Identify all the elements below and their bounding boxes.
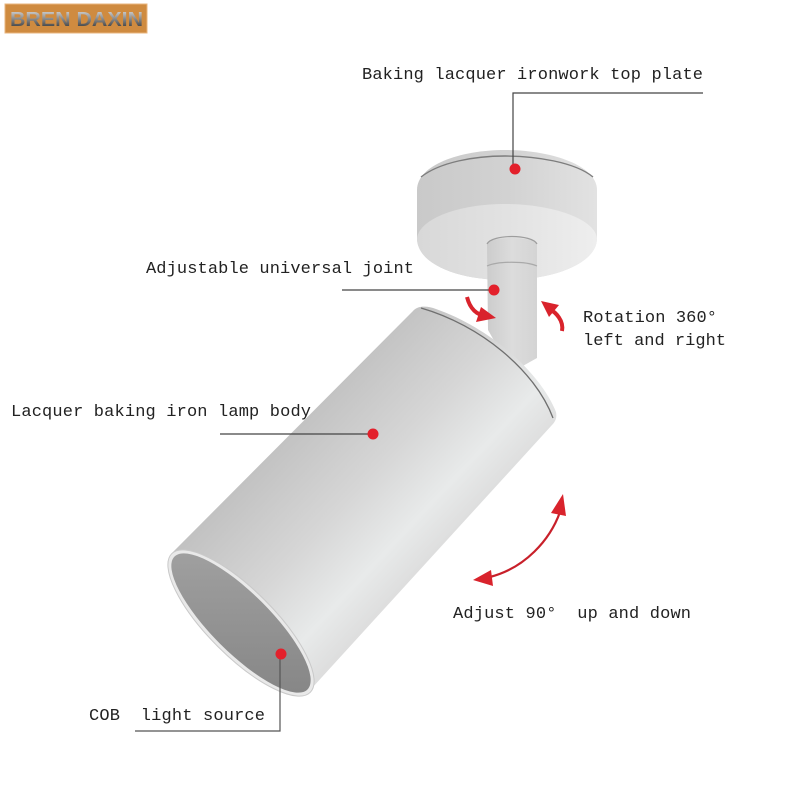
label: top plate: Baking lacquer ironwork top plate (362, 66, 703, 85)
label: universal joint (146, 260, 500, 296)
label: rotation: Rotation 360° (583, 309, 717, 328)
label: universal joint: Adjustable universal joint (146, 260, 414, 279)
arrow: adjust 90 degrees (473, 494, 566, 586)
logo: BREN DAXIN: BREN DAXIN (10, 9, 143, 31)
arrow: rotation left (467, 297, 496, 322)
cylindrical lamp body (172, 307, 556, 688)
label: adjust: Adjust 90° up and down (453, 605, 691, 624)
label: top plate (362, 66, 703, 174)
lamp opening (148, 530, 334, 716)
label: lamp body: Lacquer baking iron lamp body (11, 403, 311, 422)
ceiling top plate (417, 150, 597, 280)
label: lamp body (11, 403, 378, 440)
label: COB light source: COB light source (89, 707, 265, 726)
swivel joint stem (487, 236, 537, 372)
logo: BREN DAXIN (5, 4, 147, 33)
arrow: rotation right (541, 301, 562, 331)
label: COB light source (89, 648, 286, 731)
label: rotation: left and right (583, 332, 726, 351)
label: rotation (583, 309, 726, 351)
